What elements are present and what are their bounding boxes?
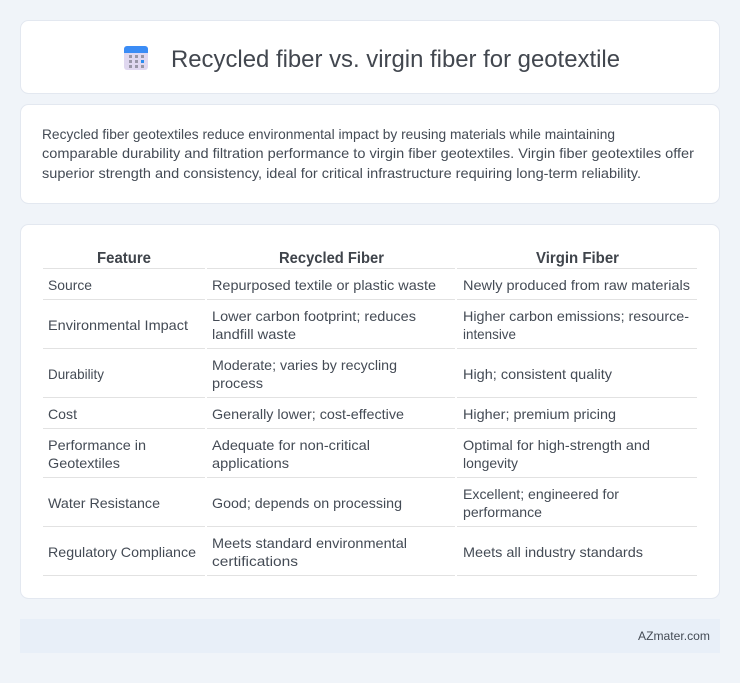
row: durability bbox=[48, 357, 612, 391]
row: environmental impact: Higher carbon emissions; resource- bbox=[463, 308, 689, 324]
row: performance in geotextiles bbox=[48, 437, 650, 471]
panel: title card bbox=[20, 20, 720, 94]
row: durability: Moderate; varies by recycling bbox=[212, 357, 397, 373]
row: regulatory compliance: Meets standard environmental bbox=[212, 535, 407, 551]
table header: Virgin Fiber bbox=[536, 250, 619, 267]
row: water resistance bbox=[48, 486, 619, 520]
row: environmental impact: intensive bbox=[463, 326, 516, 342]
row: performance in geotextiles: Optimal for high-strength and bbox=[463, 437, 650, 453]
row: performance in geotextiles: Performance in bbox=[48, 437, 146, 453]
row: environmental impact: Environmental Impact bbox=[48, 317, 188, 333]
row: environmental impact: Lower carbon footprint; reduces bbox=[212, 308, 416, 324]
text block: summary: comparable durability and filtration performance to virgin fiber geotextiles. Virgin fiber geotextiles offer bbox=[42, 145, 694, 161]
row: regulatory compliance bbox=[48, 535, 643, 569]
row: cost bbox=[48, 406, 616, 422]
row: durability: process bbox=[212, 375, 263, 391]
row: water resistance: Good; depends on processing bbox=[212, 495, 402, 511]
row: regulatory compliance: Regulatory Compliance bbox=[48, 544, 196, 560]
row: regulatory compliance: certifications bbox=[212, 553, 298, 569]
row: regulatory compliance: Meets all industry standards bbox=[463, 544, 643, 560]
table header: Feature bbox=[97, 250, 151, 267]
icon: calendar bbox=[124, 46, 148, 70]
row: cost: Cost bbox=[48, 406, 77, 422]
row: performance in geotextiles: longevity bbox=[463, 455, 518, 471]
panel: comparison table bbox=[20, 224, 720, 598]
title: Recycled fiber vs. virgin fiber for geotextile bbox=[171, 46, 620, 73]
row: environmental impact: landfill waste bbox=[212, 326, 296, 342]
row: performance in geotextiles: Geotextiles bbox=[48, 455, 120, 471]
row: water resistance: performance bbox=[463, 504, 542, 520]
footer credit: AZmater.com bbox=[638, 629, 710, 643]
row: water resistance: Water Resistance bbox=[48, 495, 160, 511]
row: performance in geotextiles: applications bbox=[212, 455, 289, 471]
row: durability: Durability bbox=[48, 366, 104, 382]
row: environmental impact bbox=[48, 308, 689, 342]
text block: summary: superior strength and consistency, ideal for critical infrastructure requiring long-term reliability. bbox=[42, 165, 641, 181]
row: source: Newly produced from raw materials bbox=[463, 277, 690, 293]
text block: summary bbox=[42, 126, 694, 181]
row: cost: Higher; premium pricing bbox=[463, 406, 616, 422]
row: source: Source bbox=[48, 277, 92, 293]
row: durability: High; consistent quality bbox=[463, 366, 612, 382]
table header bbox=[97, 250, 619, 267]
panel: summary text bbox=[20, 104, 720, 204]
table header: Recycled Fiber bbox=[279, 250, 384, 267]
row: source bbox=[48, 277, 690, 293]
footer bar bbox=[20, 619, 720, 653]
row: source: Repurposed textile or plastic waste bbox=[212, 277, 436, 293]
text block: summary: Recycled fiber geotextiles reduce environmental impact by reusing materials while maintaining bbox=[42, 126, 615, 142]
row: water resistance: Excellent; engineered for bbox=[463, 486, 619, 502]
row: cost: Generally lower; cost-effective bbox=[212, 406, 404, 422]
row: performance in geotextiles: Adequate for non-critical bbox=[212, 437, 370, 453]
